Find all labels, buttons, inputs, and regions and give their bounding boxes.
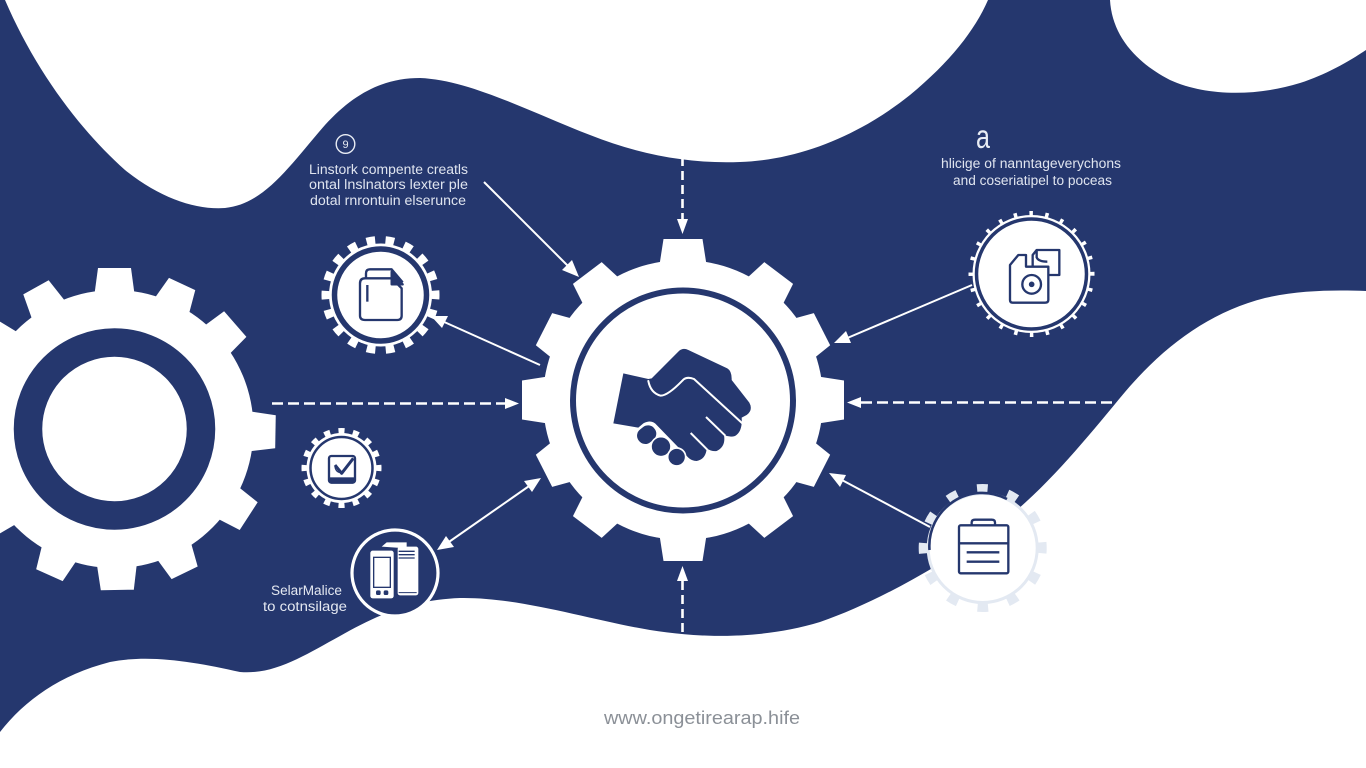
callout: top-right text block bbox=[941, 119, 1121, 188]
numbered marker bbox=[336, 135, 355, 153]
callout: top-left text block: ontal lnslnators lexter ple bbox=[309, 177, 468, 192]
dashed arrow: bottom to centre gear bbox=[677, 566, 688, 632]
icon: checkbox bbox=[329, 456, 355, 483]
arrow: clipboard gear to centre gear bbox=[829, 473, 930, 527]
callout: top-right text block: hlicige of nanntageverychons bbox=[941, 156, 1121, 171]
callout: top-right text block: and coseriatipel to poceas bbox=[953, 173, 1112, 188]
central gear with handshake bbox=[522, 239, 844, 561]
gear icon: checklist bbox=[304, 431, 378, 505]
dashed arrow: right side to centre gear bbox=[847, 397, 1112, 408]
arrow: folder gear to centre gear bbox=[834, 285, 972, 343]
callout: top-left text block: Linstork compente creatls bbox=[309, 162, 468, 177]
double arrow: phone circle to centre gear bbox=[437, 478, 541, 550]
circle icon: phones bbox=[352, 530, 438, 616]
icon: clipboard bbox=[959, 520, 1008, 573]
numbered marker: 9 bbox=[342, 139, 349, 151]
callout: top-left text block bbox=[309, 135, 468, 208]
footer url: www.ongetirearap.hife bbox=[603, 708, 800, 728]
arrow: centre gear to document gear bbox=[431, 316, 540, 365]
letter marker: a bbox=[976, 119, 991, 156]
callout: bottom-left text block: SelarMalice bbox=[271, 583, 342, 598]
icon: handshake bbox=[613, 349, 751, 466]
icon: folder and disc bbox=[1010, 250, 1059, 303]
dashed arrow: top to centre gear bbox=[677, 157, 688, 234]
arrow: top-left text to centre gear bbox=[484, 182, 579, 277]
callout: bottom-left text block: to cotnsilage bbox=[263, 599, 347, 614]
large left gear bbox=[0, 268, 276, 590]
icon: phones bbox=[370, 542, 418, 598]
callout: top-left text block: dotal rnrontuin elserunce bbox=[310, 193, 466, 208]
callout: bottom-left text block bbox=[263, 583, 347, 614]
icon: document bbox=[360, 269, 403, 320]
gear icon: document bbox=[326, 240, 436, 350]
dashed arrow: left gear to centre gear bbox=[272, 398, 519, 409]
gear icon: folder bbox=[972, 214, 1092, 334]
gear icon: clipboard bbox=[924, 489, 1042, 607]
